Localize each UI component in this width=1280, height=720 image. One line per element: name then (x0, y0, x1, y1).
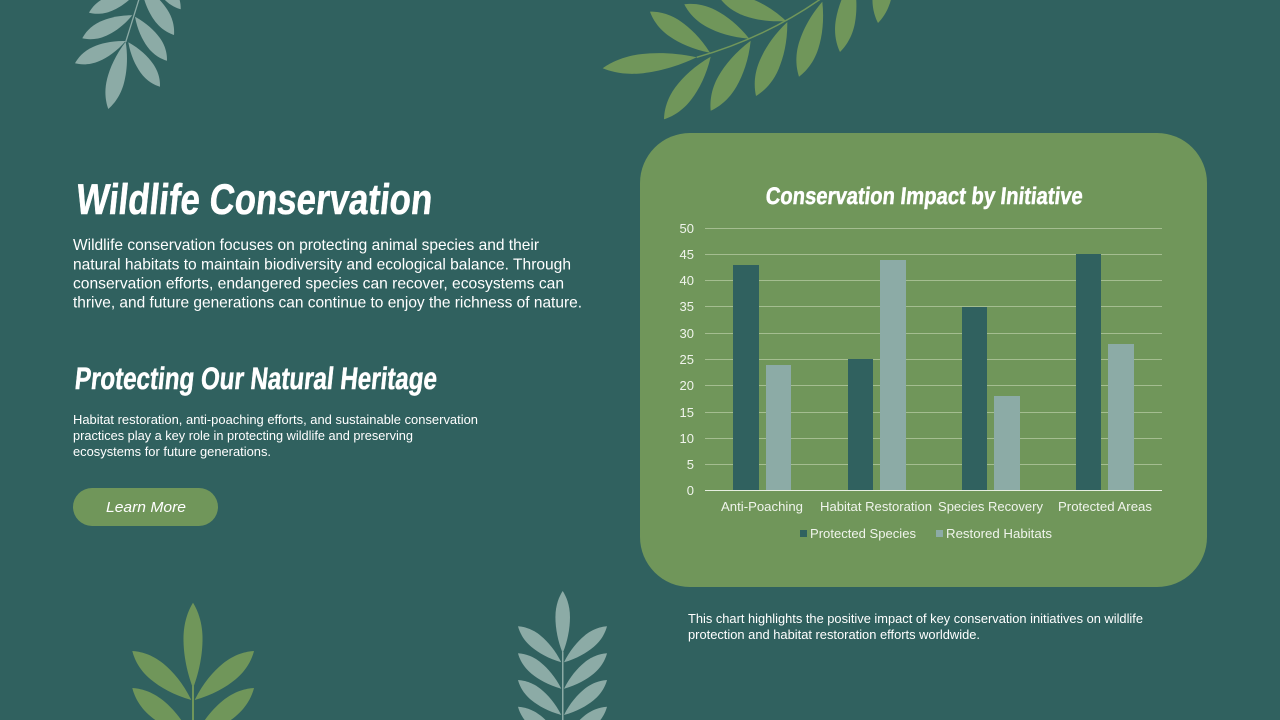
bar chart: 50 (680, 221, 694, 236)
button: learn more (73, 488, 218, 526)
icon: green leaf plant bottom left (126, 603, 260, 720)
bar chart: 10 (680, 431, 694, 446)
chart legend: Protected Species (810, 526, 916, 541)
bar chart: 25 (680, 352, 694, 367)
intro paragraph: thrive, and future generations can continue to enjoy the richness of nature. (73, 295, 582, 312)
bar chart: 20 (680, 378, 694, 393)
intro paragraph: conservation efforts, endangered species can recover, ecosystems can (73, 276, 564, 293)
supporting text: Habitat restoration, anti-poaching efforts, and sustainable conservation (73, 413, 478, 427)
bar chart: 15 (680, 405, 694, 420)
bar chart: Habitat Restoration (820, 499, 932, 514)
chart legend: Restored Habitats (946, 526, 1052, 541)
icon: light leaf plant bottom center (513, 591, 612, 720)
intro paragraph (73, 237, 582, 312)
supporting text (73, 413, 478, 459)
icon: light leaf branch top left (72, 0, 187, 111)
intro paragraph: Wildlife conservation focuses on protecting animal species and their (73, 237, 540, 254)
bar chart: 30 (680, 326, 694, 341)
bar chart: Protected Areas (1058, 499, 1153, 514)
chart title: Conservation Impact by Initiative (764, 183, 1084, 210)
button: learn more: Learn More (106, 499, 186, 516)
intro paragraph: natural habitats to maintain biodiversity and ecological balance. Through (73, 256, 571, 274)
bar chart: 45 (680, 247, 694, 262)
chart caption: This chart highlights the positive impact of key conservation initiatives on wildlife (688, 612, 1143, 626)
chart caption (688, 612, 1143, 642)
icon: green leaf branch top center (602, 0, 899, 125)
panel: chart card (640, 133, 1207, 587)
bar chart: 40 (680, 273, 694, 288)
bar chart (680, 221, 1162, 514)
supporting text: ecosystems for future generations. (73, 445, 271, 459)
chart caption: protection and habitat restoration efforts worldwide. (688, 628, 980, 642)
bar chart: 0 (687, 483, 694, 498)
title: Wildlife Conservation (74, 176, 435, 224)
bar chart: Anti-Poaching (721, 499, 803, 514)
bar chart: 5 (687, 457, 694, 472)
bar chart: 35 (680, 299, 694, 314)
bar chart: Species Recovery (938, 499, 1043, 514)
chart legend (800, 526, 1052, 541)
supporting text: practices play a key role in protecting wildlife and preserving (73, 429, 413, 443)
subheading: Protecting Our Natural Heritage (73, 361, 439, 396)
